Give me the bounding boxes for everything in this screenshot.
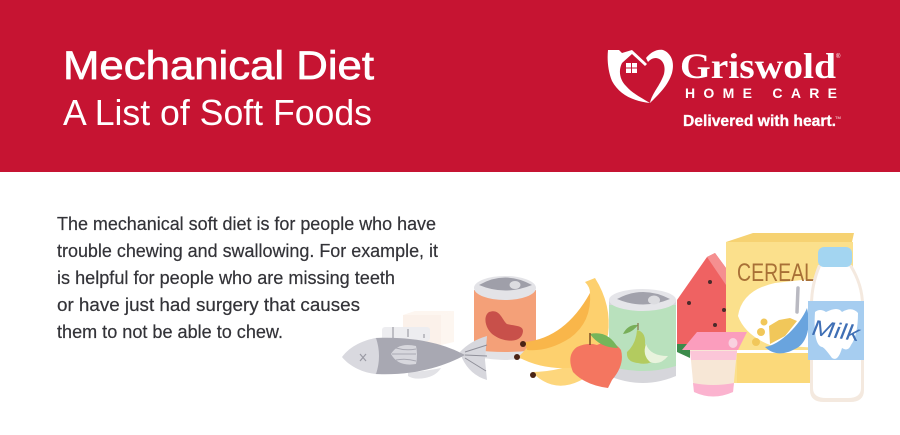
icon: bananas: [514, 278, 609, 386]
logo wordmark: TM: [835, 115, 841, 120]
logo wordmark: Delivered with heart.: [683, 113, 836, 130]
text block: introduction: them to not be able to chew.: [57, 322, 283, 342]
panel: red header: [0, 0, 900, 172]
icon: heart with house: [608, 50, 673, 103]
icon: bean can: [474, 276, 536, 360]
title: Mechanical Diet: [63, 44, 374, 88]
icon: pear can: [609, 289, 676, 383]
label: cereal: CEREAL: [737, 259, 815, 287]
label: milk: Milk: [810, 315, 863, 346]
text block: introduction: is helpful for people who are missing teeth: [57, 268, 395, 288]
text block: introduction: The mechanical soft diet is for people who have: [57, 214, 436, 234]
logo: Griswold Home Care: [608, 46, 841, 130]
icon: watermelon: [677, 253, 726, 358]
title: A List of Soft Foods: [63, 92, 372, 133]
text block: introduction: or have just had surgery that causes: [57, 295, 360, 315]
text block: introduction: trouble chewing and swallowing. For example, it: [57, 241, 438, 261]
title: [63, 44, 374, 133]
logo wordmark: HOME CARE: [685, 85, 837, 101]
text block: introduction: [57, 214, 438, 342]
icon: milk bottle: [808, 247, 864, 402]
logo wordmark: ®: [836, 53, 841, 60]
icon: cereal box: [726, 233, 854, 383]
illustration: soft foods: [342, 233, 864, 402]
icon: fish: [342, 327, 487, 380]
icon: yogurt cup: [682, 332, 747, 396]
icon: peach: [570, 333, 622, 388]
logo wordmark: Griswold: [680, 46, 836, 86]
icon: tofu: [382, 311, 454, 345]
logo wordmark: [680, 46, 841, 130]
